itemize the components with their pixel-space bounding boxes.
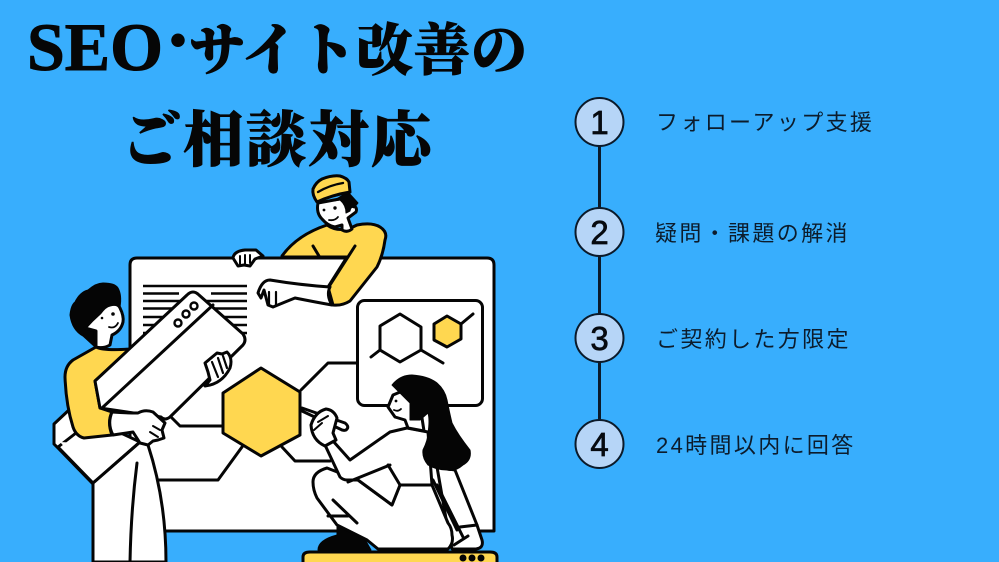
step 2: 2: [590, 214, 609, 251]
head: [318, 198, 356, 231]
text lines on board: [143, 286, 247, 333]
molecule panel: [358, 300, 482, 406]
figure: woman with pencil: [302, 375, 482, 550]
whiteboard panel: [130, 258, 494, 531]
hand: [311, 409, 337, 446]
hat: [313, 176, 350, 202]
step 3: ご契約した方限定: [656, 327, 851, 352]
step 1: 1: [590, 104, 609, 141]
step 1: フォローアップ支援: [656, 110, 874, 135]
step 4: [576, 420, 856, 468]
long hair: [392, 375, 470, 470]
face: [388, 390, 424, 431]
step 3: [576, 314, 851, 362]
title: ご相談対応: [121, 108, 439, 174]
title: SEO: [27, 9, 163, 85]
title: [27, 9, 527, 174]
left hand on board edge: [233, 250, 263, 266]
timeline connector: [598, 122, 601, 444]
tablet: [95, 292, 245, 419]
step 2: [576, 208, 850, 256]
white wrap and trousers: [54, 409, 140, 484]
step 3: 3: [590, 320, 609, 357]
step 4: 4: [590, 426, 609, 463]
step 1: [576, 98, 874, 146]
figure: man with tablet: [54, 283, 245, 562]
pencil: [302, 408, 348, 430]
upper hand: [205, 352, 231, 386]
figure: man with hat: [233, 176, 386, 307]
illustration: team building a web page: [54, 176, 497, 562]
legs: [313, 468, 452, 549]
pointing hand and forearm: [258, 280, 332, 307]
face and neck: [85, 304, 123, 348]
forearm and lower hand: [110, 411, 165, 445]
title: サイト改善の: [189, 21, 527, 83]
yellow shirt: [65, 347, 130, 438]
title: ・: [152, 15, 204, 72]
yellow sweater: [282, 224, 386, 305]
back arm and foot: [437, 467, 482, 549]
torso and drawing arm: [325, 428, 432, 505]
step 4: 24時間以内に回答: [656, 433, 856, 458]
shoe: [318, 527, 371, 550]
step 2: 疑問・課題の解消: [655, 221, 850, 246]
hair: [70, 283, 121, 347]
yellow laptop base: [303, 552, 497, 562]
large yellow hexagon: [223, 368, 300, 456]
